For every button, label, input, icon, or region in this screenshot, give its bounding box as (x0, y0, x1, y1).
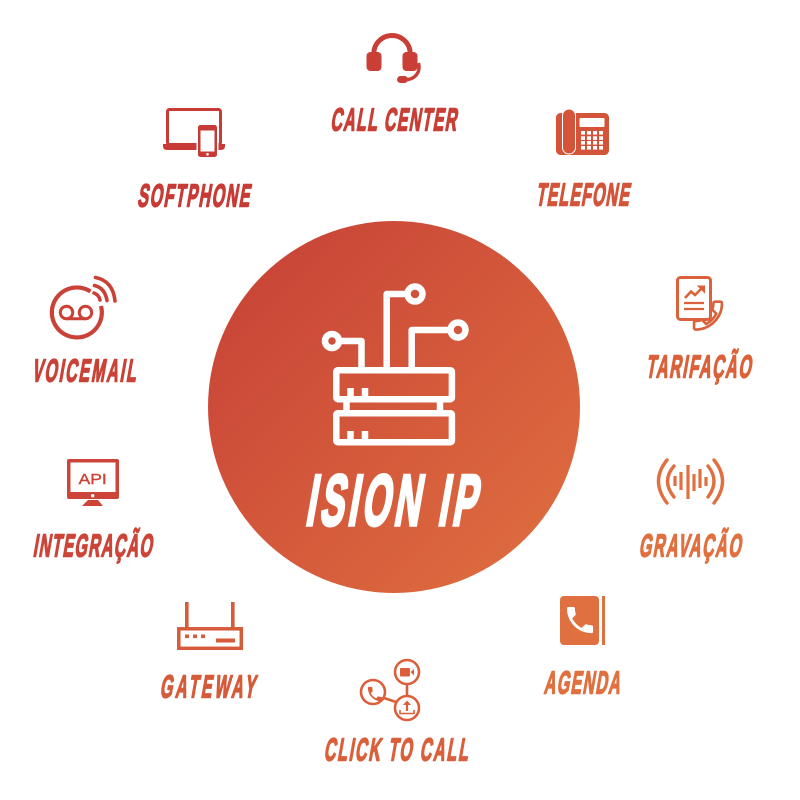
item: agenda (542, 596, 624, 701)
icon: API monitor: API (79, 471, 107, 488)
icon: connected circles (361, 660, 419, 720)
icon: headset (366, 36, 419, 83)
icon: report with phone (678, 278, 722, 330)
label: TELEFONE (534, 178, 633, 213)
label: VOICEMAIL (30, 354, 140, 389)
item: call center (329, 36, 461, 138)
item: voicemail (30, 278, 140, 389)
label: GRAVAÇÃO (637, 527, 746, 564)
item: tarifacao (644, 278, 756, 385)
icon: laptop and phone (163, 110, 225, 158)
item: integracao (31, 459, 157, 564)
product name: ISION IP (302, 461, 486, 541)
item: gateway (158, 602, 259, 705)
central circle panel (208, 221, 580, 593)
item: softphone (136, 110, 254, 214)
item: gravacao (637, 460, 746, 564)
label: TARIFAÇÃO (644, 348, 756, 385)
icon: server with circuit nodes (325, 286, 466, 442)
label: CALL CENTER (329, 103, 461, 138)
icon: desk phone (556, 109, 609, 155)
circle background (208, 221, 580, 593)
label: GATEWAY (158, 670, 259, 705)
label: INTEGRAÇÃO (31, 527, 157, 564)
label: AGENDA (542, 666, 624, 701)
item: click to call (322, 660, 472, 768)
label: CLICK TO CALL (322, 733, 472, 768)
icon: phone book (560, 596, 605, 645)
icon: sound wave (658, 460, 722, 503)
icon: voicemail with signal (52, 278, 115, 337)
label: SOFTPHONE (136, 179, 254, 214)
icon: router (179, 602, 241, 648)
item: telefone (534, 109, 633, 213)
